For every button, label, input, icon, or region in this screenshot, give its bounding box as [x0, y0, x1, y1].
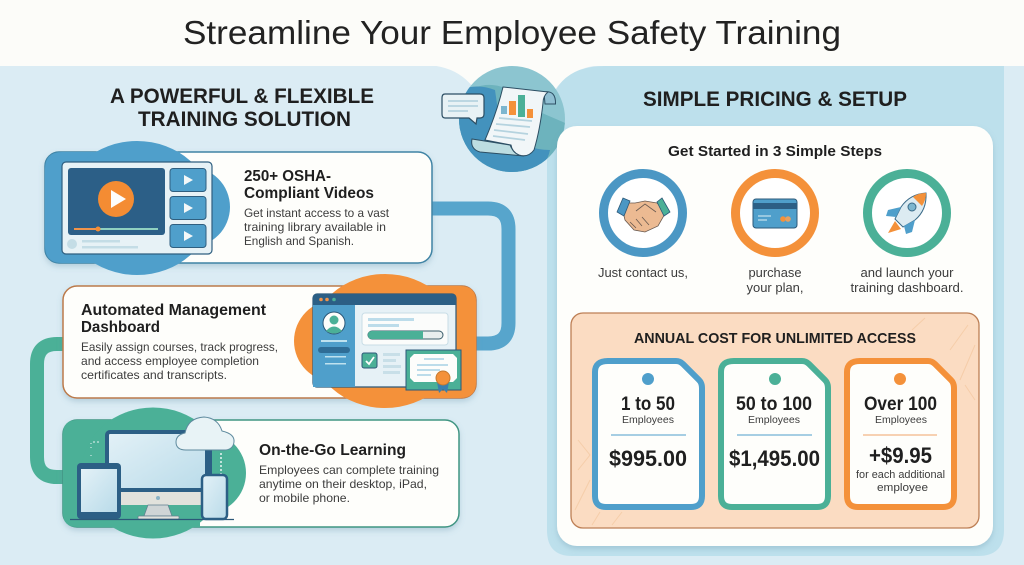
- price tag: over 100: +$9.95: [869, 443, 932, 468]
- price tag: over 100: Over 100: [864, 394, 937, 415]
- text: videos: English and Spanish.: [244, 234, 354, 248]
- price tag: 50 to 100: Employees: [748, 414, 800, 426]
- text: on-the-go: or mobile phone.: [259, 491, 350, 505]
- title: Streamline Your Employee Safety Training: [183, 14, 841, 51]
- text: dashboard: [81, 302, 278, 382]
- heading: simple pricing: SIMPLE PRICING & SETUP: [643, 88, 907, 111]
- text: dashboard: certificates and transcripts.: [81, 368, 227, 382]
- text: on-the-go: On-the-Go Learning: [259, 442, 406, 459]
- icon backdrop: green blob: [63, 408, 246, 538]
- price tag: 50 to 100: [721, 361, 828, 507]
- heading: steps: Get Started in 3 Simple Steps: [668, 143, 882, 160]
- text: videos: [244, 168, 390, 248]
- panel: simple pricing and setup background: [547, 66, 1004, 556]
- price tag: 1 to 50: $995.00: [609, 446, 687, 471]
- panel: on-the-go card: [63, 408, 459, 538]
- heading: training solution: [110, 85, 374, 131]
- text: dashboard: Dashboard: [81, 319, 160, 336]
- price tag: 1 to 50: Employees: [622, 414, 674, 426]
- connector: green: [37, 344, 65, 477]
- text: dashboard: Automated Management: [81, 302, 267, 319]
- panel: annual cost: [571, 313, 979, 528]
- price tag: over 100: employee: [877, 482, 928, 494]
- price tag: over 100: Employees: [875, 414, 927, 426]
- price tag: 50 to 100: 50 to 100: [736, 394, 812, 415]
- icon: devices: [70, 432, 234, 520]
- text: on-the-go: [259, 442, 439, 505]
- text: on-the-go: anytime on their desktop, iPad,: [259, 477, 427, 491]
- text: dashboard: and access employee completion: [81, 354, 259, 368]
- document: [472, 87, 556, 156]
- icon: report scroll emblem: [442, 66, 570, 175]
- panel: dashboard card: [63, 274, 476, 408]
- text: step labels: training dashboard.: [850, 280, 964, 295]
- panel: setup and pricing card: [557, 126, 993, 546]
- icon backdrop: blue blob: [45, 141, 230, 275]
- text: videos: Get instant access to a vast: [244, 206, 390, 220]
- text: step labels: and launch your: [860, 265, 954, 280]
- text: step labels: [598, 265, 964, 295]
- price tag: 1 to 50: 1 to 50: [621, 394, 675, 415]
- text: step labels: Just contact us,: [598, 265, 688, 280]
- icon backdrop: orange blob: [294, 274, 476, 408]
- heading: training solution: A POWERFUL & FLEXIBLE: [110, 85, 374, 108]
- heading: training solution: TRAINING SOLUTION: [138, 108, 351, 131]
- price tag: 1 to 50: [595, 361, 702, 507]
- text: videos: Compliant Videos: [244, 185, 374, 202]
- icon: credit card: [736, 174, 814, 252]
- icon: dashboard window: [313, 294, 456, 387]
- text: on-the-go: Employees can complete training: [259, 463, 439, 477]
- text: step labels: purchase: [748, 265, 802, 280]
- price tag: over 100: [847, 361, 954, 507]
- icon: handshake: [604, 174, 682, 252]
- heading: annual cost: ANNUAL COST FOR UNLIMITED ACCESS: [634, 330, 916, 347]
- price tag: over 100: for each additional: [856, 469, 945, 481]
- icon: cloud: [176, 417, 234, 450]
- speech bubble: [442, 94, 484, 124]
- panel: videos card: [45, 141, 432, 275]
- icon: rocket: [868, 174, 946, 252]
- connector: blue: [430, 208, 508, 344]
- icon: video player: [62, 162, 212, 254]
- text: videos: 250+ OSHA-: [244, 168, 331, 185]
- text: step labels: your plan,: [746, 280, 804, 295]
- price tag: 50 to 100: $1,495.00: [729, 446, 820, 471]
- icon: certificate: [406, 350, 461, 393]
- text: videos: training library available in: [244, 220, 386, 234]
- text: dashboard: Easily assign courses, track progress,: [81, 340, 278, 354]
